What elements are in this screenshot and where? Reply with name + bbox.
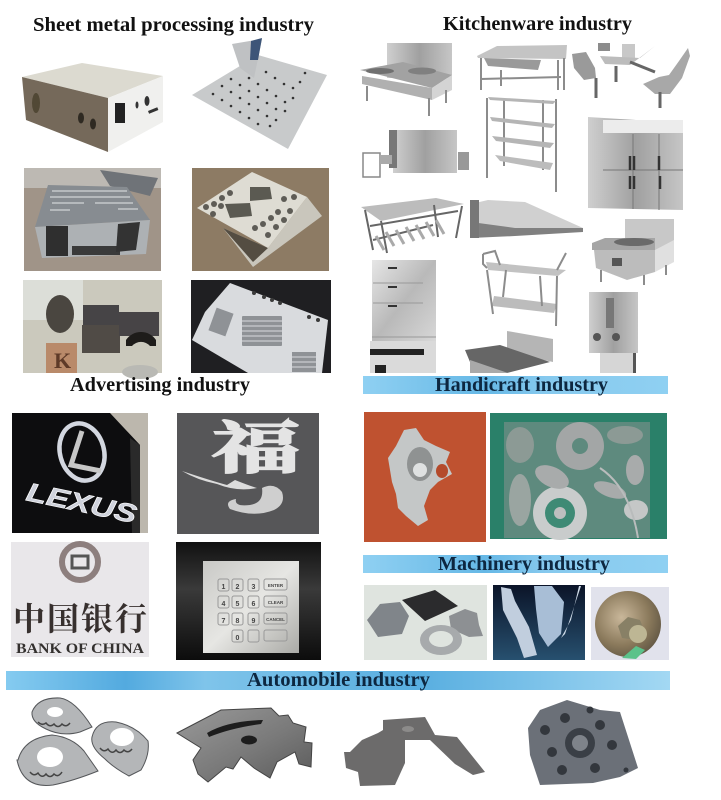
photo: aluminium part on red — [364, 412, 486, 542]
photo: white chassis on black — [191, 280, 331, 373]
photo: steel keypad: 8 — [236, 618, 240, 625]
photo: steel keypad: 1 — [222, 584, 226, 591]
photo: steel keypad: 2 — [236, 584, 240, 591]
photo: Bank of China sign: 中国银行 — [13, 601, 147, 637]
photo: etched samples on desk — [23, 280, 162, 379]
photo: four door fridge — [588, 117, 683, 210]
photo: steel keypad: 6 — [252, 601, 256, 608]
photo: drawer steamer cabinet — [370, 260, 436, 373]
panel: advertising industry — [11, 374, 321, 660]
photo: steel keypad: 0 — [236, 635, 240, 642]
photo: large notched plate — [177, 708, 312, 782]
heading band: machinery: Machinery industry — [438, 553, 610, 575]
photo: steel keypad: 7 — [222, 618, 226, 625]
photo: dishwasher — [363, 130, 469, 177]
heading: kitchenware: Kitchenware industry — [443, 13, 632, 35]
photo: bracket plate — [344, 717, 485, 786]
photo: vented chassis — [24, 168, 161, 271]
photo: saw blade and plates on blue — [493, 585, 585, 660]
photo: Bank of China sign — [11, 542, 149, 657]
photo: white enclosure box — [22, 63, 163, 152]
photo: machined parts — [364, 585, 487, 660]
panel: kitchenware industry — [360, 13, 690, 373]
photo: steel keypad: ENTER — [268, 583, 284, 588]
photo: Lexus sign — [12, 413, 148, 533]
photo: slatted work table — [361, 198, 464, 253]
photo: Lexus sign: LEXUS — [24, 477, 140, 529]
heading band: automobile: Automobile industry — [247, 669, 430, 691]
photo: gold disc and nut — [591, 587, 669, 660]
photo: trolley — [483, 251, 566, 326]
heading: advertising: Advertising industry — [70, 374, 250, 396]
photo: steel keypad: CLEAR — [268, 600, 284, 605]
heading band: handicraft — [363, 374, 668, 396]
photo: six burner range — [465, 331, 553, 373]
photo: steel keypad: 5 — [236, 601, 240, 608]
photo: hood — [470, 200, 583, 238]
panel: automobile industry — [6, 669, 670, 786]
photo: canteen table with chairs — [572, 43, 690, 108]
heading band: handicraft: Handicraft industry — [435, 374, 608, 396]
photo: etched samples on desk: K — [54, 348, 71, 373]
panel: handicraft industry — [363, 374, 668, 542]
heading band: automobile — [6, 669, 670, 691]
photo: water boiler — [589, 292, 638, 373]
photo: brushed steel Fu character: 福 — [212, 419, 300, 481]
photo: three gear cams — [17, 698, 148, 785]
heading band: machinery — [363, 553, 668, 575]
photo: Bank of China sign: BANK OF CHINA — [16, 641, 145, 657]
photo: sink table — [477, 45, 567, 90]
panel: sheet metal processing industry — [22, 14, 331, 379]
photo: cast valve body — [528, 700, 638, 785]
photo: steel keypad: 9 — [252, 618, 256, 625]
photo: steel keypad — [176, 542, 321, 660]
photo: steel keypad: 3 — [252, 584, 256, 591]
photo: steel keypad: CANCEL — [266, 617, 285, 622]
photo: double wok stove — [360, 43, 452, 116]
photo: single wok stove — [592, 219, 674, 285]
photo: steel keypad: 4 — [222, 601, 226, 608]
photo: floral steel stencil on green — [490, 413, 667, 540]
photo: four tier shelf — [487, 97, 556, 192]
photo: perforated plate — [192, 38, 327, 149]
photo: box with lid — [192, 168, 329, 271]
heading: sheet metal: Sheet metal processing industry — [33, 14, 314, 36]
panel: machinery industry — [363, 553, 669, 660]
photo: brushed steel Fu character — [177, 413, 319, 534]
